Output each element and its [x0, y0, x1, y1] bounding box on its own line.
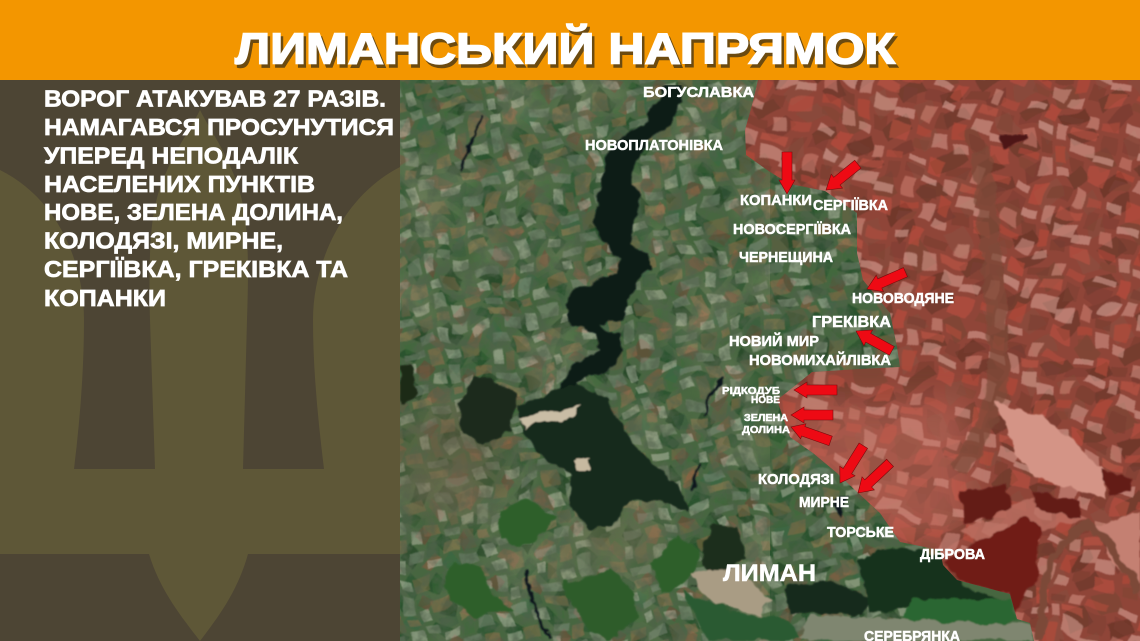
text block: situation summary: [44, 86, 394, 311]
occupied zone: [720, 60, 1140, 641]
settlement labels: НОВЕ: [751, 395, 780, 406]
settlement labels: СЕРГІЇВКА: [813, 197, 888, 214]
settlement labels: [585, 84, 985, 641]
text block: situation summary: СЕРГІЇВКА, ГРЕКІВКА ТА: [44, 256, 348, 282]
text block: situation summary: НОВЕ, ЗЕЛЕНА ДОЛИНА,: [44, 199, 343, 225]
forests and fields: [400, 362, 416, 405]
text block: situation summary: НАМАГАВСЯ ПРОСУНУТИСЯ: [44, 114, 394, 140]
text block: situation summary: НАСЕЛЕНИХ ПУНКТІВ: [44, 171, 315, 197]
text block: situation summary: КОПАНКИ: [44, 285, 166, 311]
settlement labels: ЛИМАН: [723, 560, 816, 587]
satellite map: [380, 60, 1140, 641]
settlement labels: ТОРСЬКЕ: [827, 524, 894, 541]
settlement labels: НОВОСЕРГІЇВКА: [733, 221, 851, 238]
settlement labels: КОЛОДЯЗІ: [758, 471, 834, 488]
reservoir: [558, 85, 682, 392]
text block: situation summary: УПЕРЕД НЕПОДАЛІК: [44, 142, 299, 168]
settlement labels: ЗЕЛЕНА: [744, 413, 788, 424]
settlement labels: НОВИЙ МИР: [729, 332, 819, 350]
settlement labels: ДІБРОВА: [920, 546, 985, 563]
settlement labels: БОГУСЛАВКА: [643, 84, 754, 101]
title: ЛИМАНСЬКИЙ НАПРЯМОК: [235, 22, 895, 74]
settlement labels: МИРНЕ: [799, 494, 849, 511]
settlement labels: НОВОВОДЯНЕ: [852, 290, 954, 307]
text block: situation summary: ВОРОГ АТАКУВАВ 27 РАЗІВ.: [44, 86, 386, 112]
settlement labels: КОПАНКИ: [740, 192, 812, 209]
title: ЛИМАНСЬКИЙ НАПРЯМОК: [238, 26, 898, 77]
settlement labels: ДОЛИНА: [742, 425, 790, 436]
attack arrows: [779, 152, 909, 500]
header bar: [0, 0, 1140, 80]
settlement labels: НОВОМИХАЙЛІВКА: [749, 351, 891, 369]
settlement labels: ГРЕКІВКА: [812, 314, 891, 331]
settlement labels: РІДКОДУБ: [722, 386, 780, 397]
settlement labels: НОВОПЛАТОНІВКА: [585, 137, 723, 154]
text block: situation summary: КОЛОДЯЗІ, МИРНЕ,: [44, 228, 283, 254]
left panel: trident background: [0, 80, 400, 641]
settlement labels: ЧЕРНЕЩИНА: [739, 249, 833, 266]
